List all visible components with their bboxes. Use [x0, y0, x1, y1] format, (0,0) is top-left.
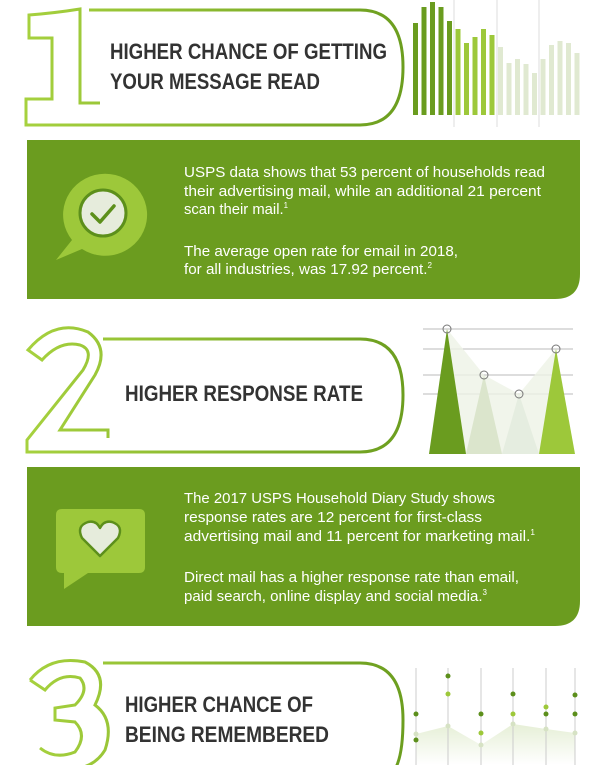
panel 2 text: response rates are 12 percent for first-class: [184, 509, 482, 526]
panel 1 text: 2: [427, 261, 433, 270]
icon: check speech bubble: [56, 174, 147, 260]
panel 2 text: 1: [530, 528, 536, 537]
panel 1 text: their advertising mail, while an additional 21 percent: [184, 183, 542, 200]
panel 1 text: USPS data shows that 53 percent of households read: [184, 164, 545, 181]
panel 1 text: scan their mail.: [184, 201, 285, 218]
title 3: BEING REMEMBERED: [125, 722, 329, 747]
title 1: [110, 39, 387, 94]
title 1: YOUR MESSAGE READ: [110, 69, 320, 94]
section 3 header box: [30, 660, 403, 770]
bar chart: [413, 0, 580, 127]
panel 2: [27, 467, 580, 626]
panel 2 text: [184, 490, 536, 605]
title 3: HIGHER CHANCE OF: [125, 692, 313, 717]
dot chart: [414, 668, 578, 765]
number 1 outline: [26, 9, 403, 125]
title 2: HIGHER RESPONSE RATE: [125, 381, 363, 406]
panel 1 text: [184, 164, 545, 278]
panel 2 text: 3: [483, 588, 488, 597]
panel 2 text: paid search, online display and social media.: [184, 588, 482, 605]
section 2 header box: [27, 328, 403, 452]
number 3 outline: [30, 660, 403, 770]
panel 2 text: advertising mail and 11 percent for marketing mail.: [184, 528, 519, 545]
section 1 header box: [26, 9, 403, 125]
panel 1: [27, 140, 580, 299]
panel 1 text: 1: [284, 201, 289, 210]
panel 2 text: The 2017 USPS Household Diary Study shows: [184, 490, 495, 507]
number 2 outline: [27, 328, 403, 452]
title 1: HIGHER CHANCE OF GETTING: [110, 39, 387, 64]
panel 2 text: Direct mail has a higher response rate than email,: [184, 569, 519, 586]
panel 1 text: The average open rate for email in 2018,: [184, 243, 458, 260]
icon: heart speech bubble: [56, 509, 145, 589]
title 3: [125, 692, 329, 747]
triangle chart: [423, 325, 575, 454]
panel 1 text: for all industries, was 17.92 percent.: [184, 261, 424, 278]
